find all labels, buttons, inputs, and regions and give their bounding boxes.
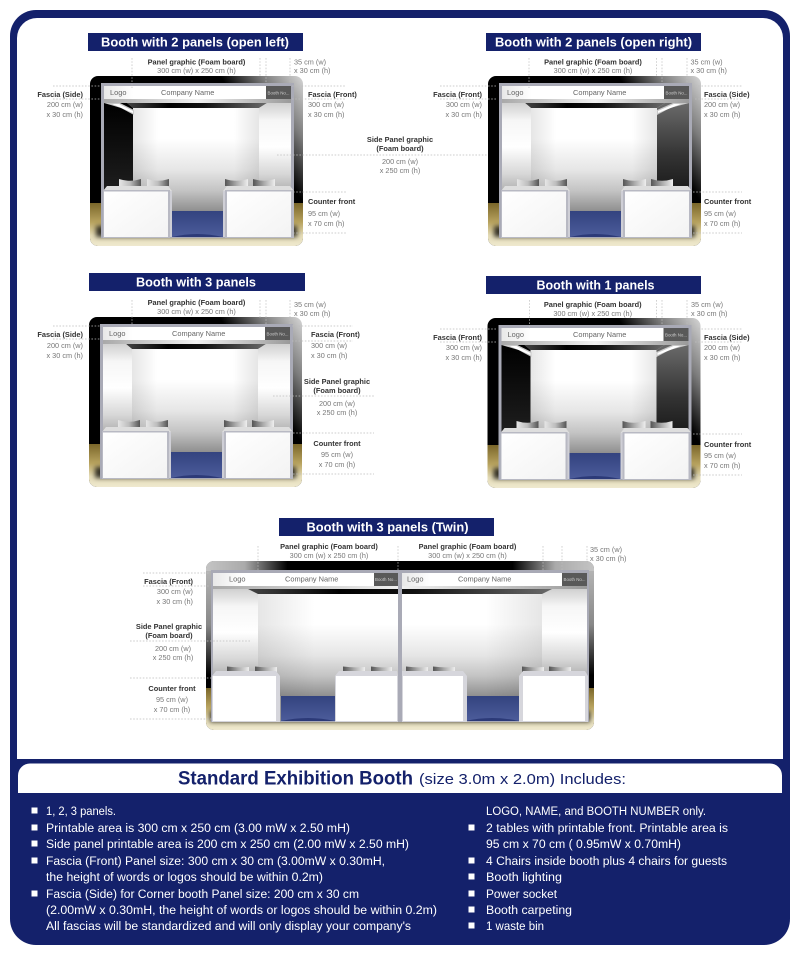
label: fascia front: Fascia (Front): [308, 90, 357, 99]
label: booth number size: 35 cm (w): [590, 545, 622, 554]
booth illustration: open left: Booth No...: [268, 90, 289, 96]
label: booth number size: [590, 545, 626, 563]
label: counter front: x 70 cm (h): [308, 219, 344, 228]
label: counter front: x 70 cm (h): [704, 219, 740, 228]
list: left column: 1, 2, 3 panels.: [46, 804, 116, 818]
booth illustration: twin: Company Name: [285, 574, 338, 584]
label: fascia side: Fascia (Side): [37, 330, 84, 339]
label: counter front: 95 cm (w): [704, 451, 736, 460]
label: fascia front: x 30 cm (h): [446, 353, 482, 362]
label: fascia front: Fascia (Front): [433, 333, 483, 342]
booth illustration: twin: Logo: [407, 574, 423, 584]
booth illustration: open left: Company Name: [161, 88, 214, 97]
label: panel graphic: Panel graphic (Foam board): [148, 298, 246, 307]
label: counter front: [308, 197, 356, 228]
label: side panel graphic: (Foam board): [145, 631, 193, 640]
label: booth number size: x 30 cm (h): [691, 309, 728, 318]
label: fascia front: x 30 cm (h): [311, 351, 348, 360]
label: counter front: Counter front: [308, 197, 356, 206]
label: panel graphic: [544, 58, 642, 75]
label: panel graphic right: 300 cm (w) x 250 cm (h): [428, 551, 507, 560]
label: booth number size: x 30 cm (h): [294, 309, 330, 318]
label: side panel graphic: 200 cm (w): [319, 399, 355, 408]
panel: includes heading: [18, 764, 782, 793]
label: panel graphic: 300 cm (w) x 250 cm (h): [157, 66, 236, 75]
list: left column: Printable area is 300 cm x 250 cm (3.00 mW x 2.50 mH): [46, 821, 350, 835]
label: booth number size: [294, 58, 330, 75]
label: booth number size: [690, 58, 727, 75]
heading: open right: [486, 33, 701, 51]
list: right column: 4 Chairs inside booth plus 4 chairs for guests: [486, 854, 727, 868]
list: right column: Booth lighting: [486, 870, 562, 884]
label: counter front: [704, 440, 752, 470]
list: right column: 1 waste bin: [486, 919, 544, 933]
booth illustration: open right: Logo: [507, 88, 523, 97]
label: panel graphic: [544, 300, 642, 318]
booth illustration: 3 panels: [89, 317, 302, 487]
heading: 1 panel: Booth with 1 panels: [536, 278, 655, 292]
list: right column: 95 cm x 70 cm ( 0.95mW x 0.70mH): [486, 837, 681, 851]
label: panel graphic: Panel graphic (Foam board): [544, 300, 642, 309]
list: right column: LOGO, NAME, and BOOTH NUMBER only.: [486, 804, 706, 818]
label: counter front: Counter front: [704, 197, 752, 206]
label: side panel graphic: [304, 377, 370, 417]
label: side panel graphic: x 250 cm (h): [317, 408, 357, 417]
panel: booth with 2 panels (open right): [433, 33, 752, 246]
label: counter front: Counter front: [148, 684, 196, 693]
label: counter front: x 70 cm (h): [319, 460, 355, 469]
list: right column: Power socket: [486, 887, 558, 901]
label: booth number size: [294, 300, 330, 318]
panel: booth with 1 panels: [433, 276, 752, 488]
label: booth number size: [691, 300, 728, 318]
label: panel graphic left: 300 cm (w) x 250 cm (h): [290, 551, 368, 560]
label: counter front: 95 cm (w): [704, 209, 736, 218]
label: fascia front: Fascia (Front): [311, 330, 360, 339]
label: panel graphic: Panel graphic (Foam board): [148, 58, 246, 66]
label: counter front: Counter front: [704, 440, 752, 449]
panel: booth with 3 panels (twin): [130, 518, 626, 730]
label: side panel graphic: [136, 622, 202, 662]
booth illustration: 1 panel: Company Name: [573, 330, 626, 339]
dimension guide lines: [53, 58, 346, 233]
list: left column: [32, 804, 437, 933]
panel: booth with 3 panels: [37, 273, 374, 487]
heading: open right: Booth with 2 panels (open right): [495, 36, 692, 50]
label: fascia side: 200 cm (w): [47, 341, 83, 350]
label: booth number size: 35 cm (w): [690, 58, 723, 66]
label: fascia side: Fascia (Side): [704, 90, 750, 99]
list: left column: Side panel printable area is 200 cm x 250 cm (2.00 mW x 2.50 mH): [46, 837, 409, 851]
label: fascia front: x 30 cm (h): [446, 110, 482, 119]
label: counter front: 95 cm (w): [308, 209, 340, 218]
list: left column: the height of words or logos should be within 0.2m): [46, 870, 323, 884]
label: panel graphic: 300 cm (w) x 250 cm (h): [554, 66, 632, 75]
label: panel graphic: [148, 298, 246, 316]
panel: includes heading: (size 3.0m x 2.0m) Includes:: [419, 771, 626, 788]
booth illustration: 3 panels: Logo: [109, 329, 125, 338]
label: fascia side: 200 cm (w): [704, 100, 740, 109]
label: panel graphic: 300 cm (w) x 250 cm (h): [553, 309, 632, 318]
label: counter front: 95 cm (w): [156, 695, 188, 704]
label: fascia front: [433, 333, 483, 362]
label: shared side panel graphic: Side Panel graphic: [367, 135, 433, 144]
label: fascia front: 300 cm (w): [308, 100, 344, 109]
label: fascia front: x 30 cm (h): [308, 110, 344, 119]
label: fascia side: [37, 90, 84, 119]
label: fascia front: Fascia (Front): [144, 577, 194, 586]
label: fascia front: x 30 cm (h): [156, 597, 193, 606]
booth illustration: 3 panels: Company Name: [172, 329, 225, 338]
booth illustration: open left: Logo: [110, 88, 126, 97]
heading: 3 panels: [89, 273, 305, 291]
label: fascia side: [37, 330, 84, 360]
label: counter front: Counter front: [313, 439, 361, 448]
label: side panel graphic: (Foam board): [313, 386, 361, 395]
label: fascia side: [704, 333, 750, 362]
heading: open left: Booth with 2 panels (open left): [101, 36, 289, 50]
booth illustration: twin: Booth No...: [375, 577, 397, 582]
label: fascia side: 200 cm (w): [47, 100, 83, 109]
label: fascia side: Fascia (Side): [704, 333, 750, 342]
label: booth number size: x 30 cm (h): [590, 554, 626, 563]
label: booth number size: 35 cm (w): [294, 300, 326, 309]
label: panel graphic: 300 cm (w) x 250 cm (h): [157, 307, 236, 316]
label: fascia front: [144, 577, 194, 606]
label: panel graphic: [148, 58, 246, 75]
list: right column: 2 tables with printable front. Printable area is: [486, 821, 728, 835]
booth illustration: open right: Booth No...: [666, 90, 687, 96]
label: booth number size: x 30 cm (h): [294, 66, 330, 75]
heading: open left: [88, 33, 303, 51]
label: side panel graphic: 200 cm (w): [155, 644, 191, 653]
label: panel graphic right: [419, 542, 517, 560]
panel: booth with 2 panels (open left): [37, 33, 357, 246]
label: counter front: [313, 439, 361, 469]
label: fascia front: 300 cm (w): [311, 341, 347, 350]
label: shared side panel graphic: [277, 135, 517, 175]
label: fascia front: 300 cm (w): [446, 343, 482, 352]
label: counter front: x 70 cm (h): [154, 705, 190, 714]
booth illustration: 3 panels: Booth No...: [267, 332, 288, 336]
label: fascia side: x 30 cm (h): [704, 110, 740, 119]
label: side panel graphic: Side Panel graphic: [304, 377, 370, 386]
booth illustration: open left: [90, 76, 303, 246]
booth illustration: 1 panel: Booth No...: [665, 332, 687, 338]
label: fascia side: Fascia (Side): [37, 90, 84, 99]
label: shared side panel graphic: (Foam board): [376, 144, 424, 153]
list: left column: All fascias will be standardized and will only display your company's: [46, 919, 411, 933]
heading: 1 panel: [486, 276, 701, 294]
list: left column: Fascia (Front) Panel size: 300 cm x 30 cm (3.00mW x 0.30mH,: [46, 854, 385, 868]
booth illustration: twin: [206, 561, 594, 730]
label: fascia front: 300 cm (w): [157, 587, 193, 596]
label: fascia side: x 30 cm (h): [46, 351, 83, 360]
booth illustration: 1 panel: [488, 318, 700, 488]
label: counter front: 95 cm (w): [321, 450, 353, 459]
list: left column: (2.00mW x 0.30mH, the height of words or logos should be within 0.2m): [46, 903, 437, 917]
label: side panel graphic: x 250 cm (h): [153, 653, 193, 662]
label: fascia side: x 30 cm (h): [46, 110, 83, 119]
label: panel graphic: Panel graphic (Foam board): [544, 58, 642, 66]
booth illustration: twin: Logo: [229, 574, 245, 584]
label: booth number size: 35 cm (w): [294, 58, 326, 66]
panel: includes heading: Standard Exhibition Booth: [178, 768, 413, 790]
label: panel graphic left: Panel graphic (Foam board): [280, 542, 378, 551]
list: right column: Booth carpeting: [486, 903, 572, 917]
heading: twin: [279, 518, 494, 536]
label: panel graphic right: Panel graphic (Foam board): [419, 542, 517, 551]
booth illustration: 1 panel: Logo: [508, 330, 524, 339]
label: booth number size: x 30 cm (h): [690, 66, 727, 75]
label: fascia front: [433, 90, 483, 119]
white content panel: [17, 18, 783, 759]
label: side panel graphic: Side Panel graphic: [136, 622, 202, 631]
heading: 3 panels: Booth with 3 panels: [136, 276, 256, 290]
label: fascia side: [704, 90, 750, 119]
label: fascia side: 200 cm (w): [704, 343, 740, 352]
label: shared side panel graphic: x 250 cm (h): [380, 166, 420, 175]
label: booth number size: 35 cm (w): [691, 300, 723, 309]
label: panel graphic left: [280, 542, 378, 560]
booth illustration: open right: [488, 76, 701, 246]
dimension guide lines: [130, 546, 587, 719]
label: counter front: [704, 197, 752, 228]
label: fascia side: x 30 cm (h): [704, 353, 740, 362]
dimension guide lines: [440, 58, 742, 233]
label: fascia front: 300 cm (w): [446, 100, 482, 109]
booth illustration: twin: Booth No...: [564, 577, 585, 582]
label: shared side panel graphic: 200 cm (w): [382, 157, 418, 166]
label: fascia front: [308, 90, 357, 119]
booth illustration: open right: Company Name: [573, 88, 626, 97]
label: fascia front: [311, 330, 360, 360]
label: counter front: [148, 684, 196, 714]
list: right column: [468, 804, 728, 933]
heading: twin: Booth with 3 panels (Twin): [306, 520, 468, 534]
label: fascia front: Fascia (Front): [433, 90, 483, 99]
dimension guide lines: [53, 300, 374, 474]
booth illustration: twin: Company Name: [458, 574, 511, 584]
list: left column: Fascia (Side) for Corner booth Panel size: 200 cm x 30 cm: [46, 887, 359, 901]
dimension guide lines: [440, 300, 742, 475]
label: counter front: x 70 cm (h): [704, 461, 740, 470]
